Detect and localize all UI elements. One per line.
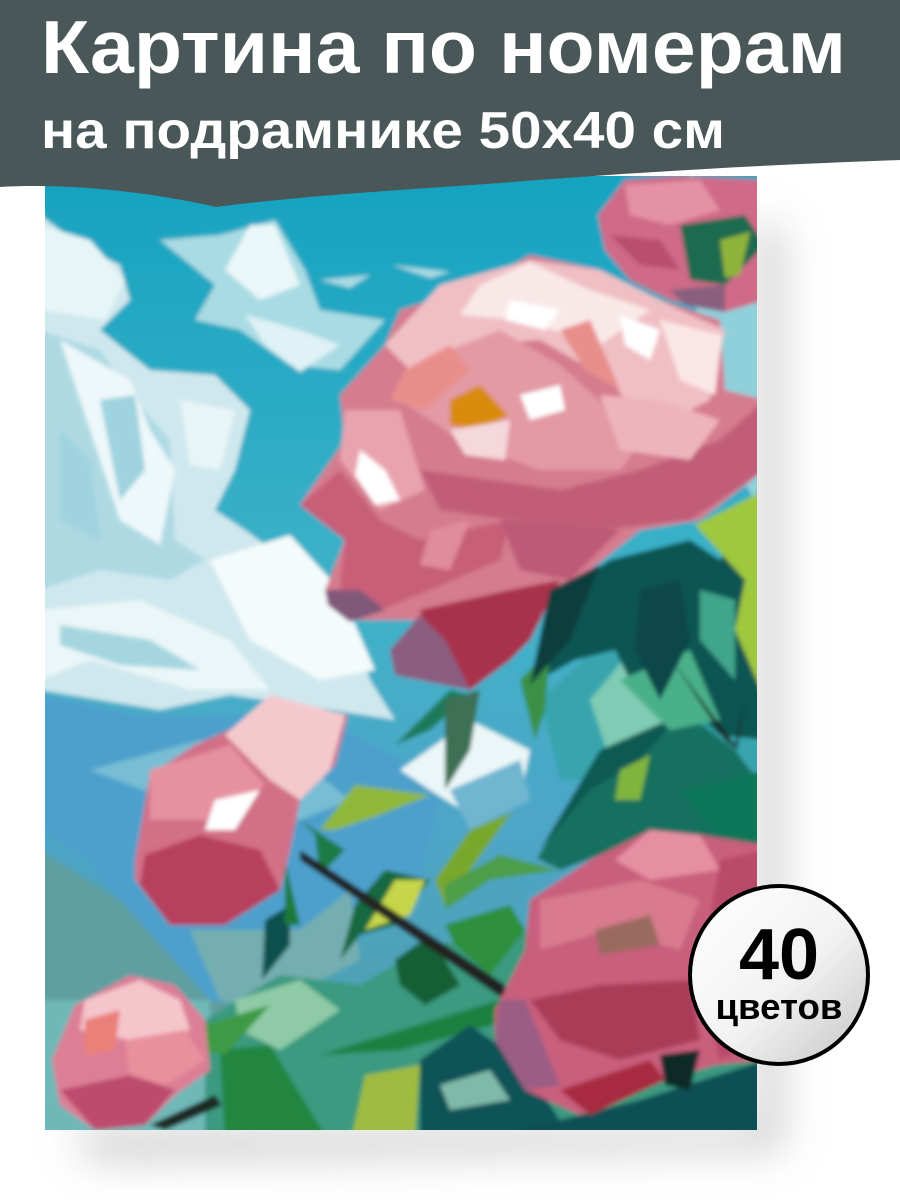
header banner bbox=[0, 0, 900, 207]
peony: left middle bbox=[135, 695, 348, 925]
badge label: цветов bbox=[716, 986, 842, 1027]
badge number: 40 bbox=[739, 915, 819, 995]
sky background bbox=[45, 176, 757, 988]
foliage bbox=[150, 480, 765, 1135]
title: Картина по номерам bbox=[41, 5, 846, 89]
peony: bottom left bbox=[52, 975, 210, 1130]
subtitle: на подрамнике 50х40 см bbox=[41, 102, 725, 160]
clouds bbox=[40, 170, 765, 1135]
canvas drop shadow bbox=[70, 215, 782, 1160]
peony: lower right bbox=[495, 830, 765, 1115]
peony: large central bbox=[300, 255, 765, 690]
painting: peonies against the sky bbox=[40, 170, 765, 1135]
badge: 40 colours bbox=[690, 886, 868, 1064]
peony: top right bbox=[598, 176, 765, 312]
